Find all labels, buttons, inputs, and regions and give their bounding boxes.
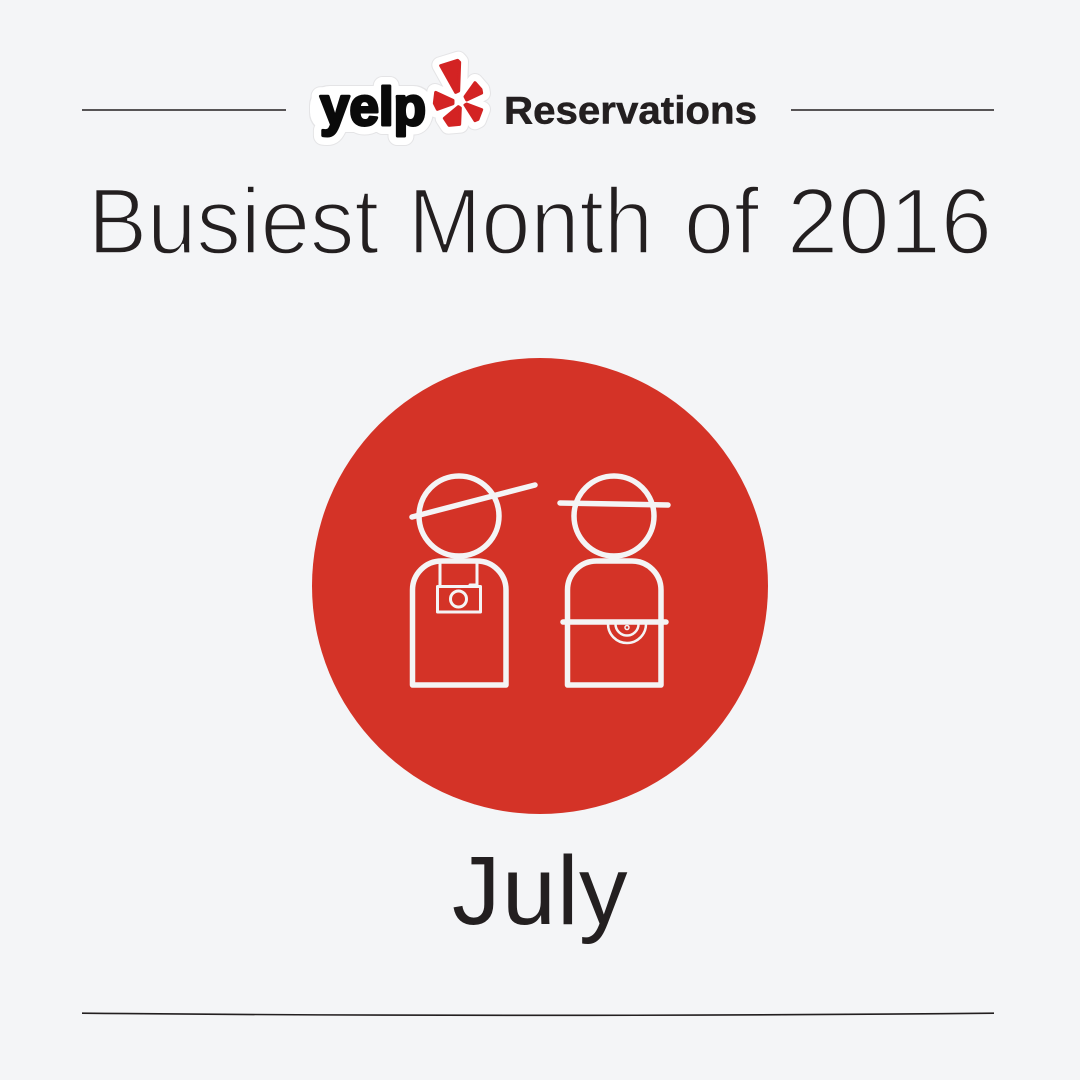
yelp logo: yelp (320, 77, 426, 137)
month label: July (452, 836, 628, 945)
icon: fanny pack (608, 624, 646, 643)
icon: camera (438, 561, 480, 612)
title (88, 168, 992, 274)
title: of (684, 168, 760, 274)
title: Busiest (88, 168, 379, 274)
title: Month (408, 168, 653, 274)
yelp logo (309, 59, 482, 137)
reservations label: Reservations (504, 90, 757, 132)
icon: tourist with fanny pack (560, 476, 668, 685)
yelp logo: yelp (320, 77, 426, 137)
icon: tourist with camera (412, 476, 535, 685)
title: 2016 (787, 168, 992, 274)
yelp logo: yelp (320, 77, 426, 137)
icon: yelp burst (434, 60, 482, 125)
icon: tourists (412, 476, 668, 685)
red circle (312, 358, 768, 814)
